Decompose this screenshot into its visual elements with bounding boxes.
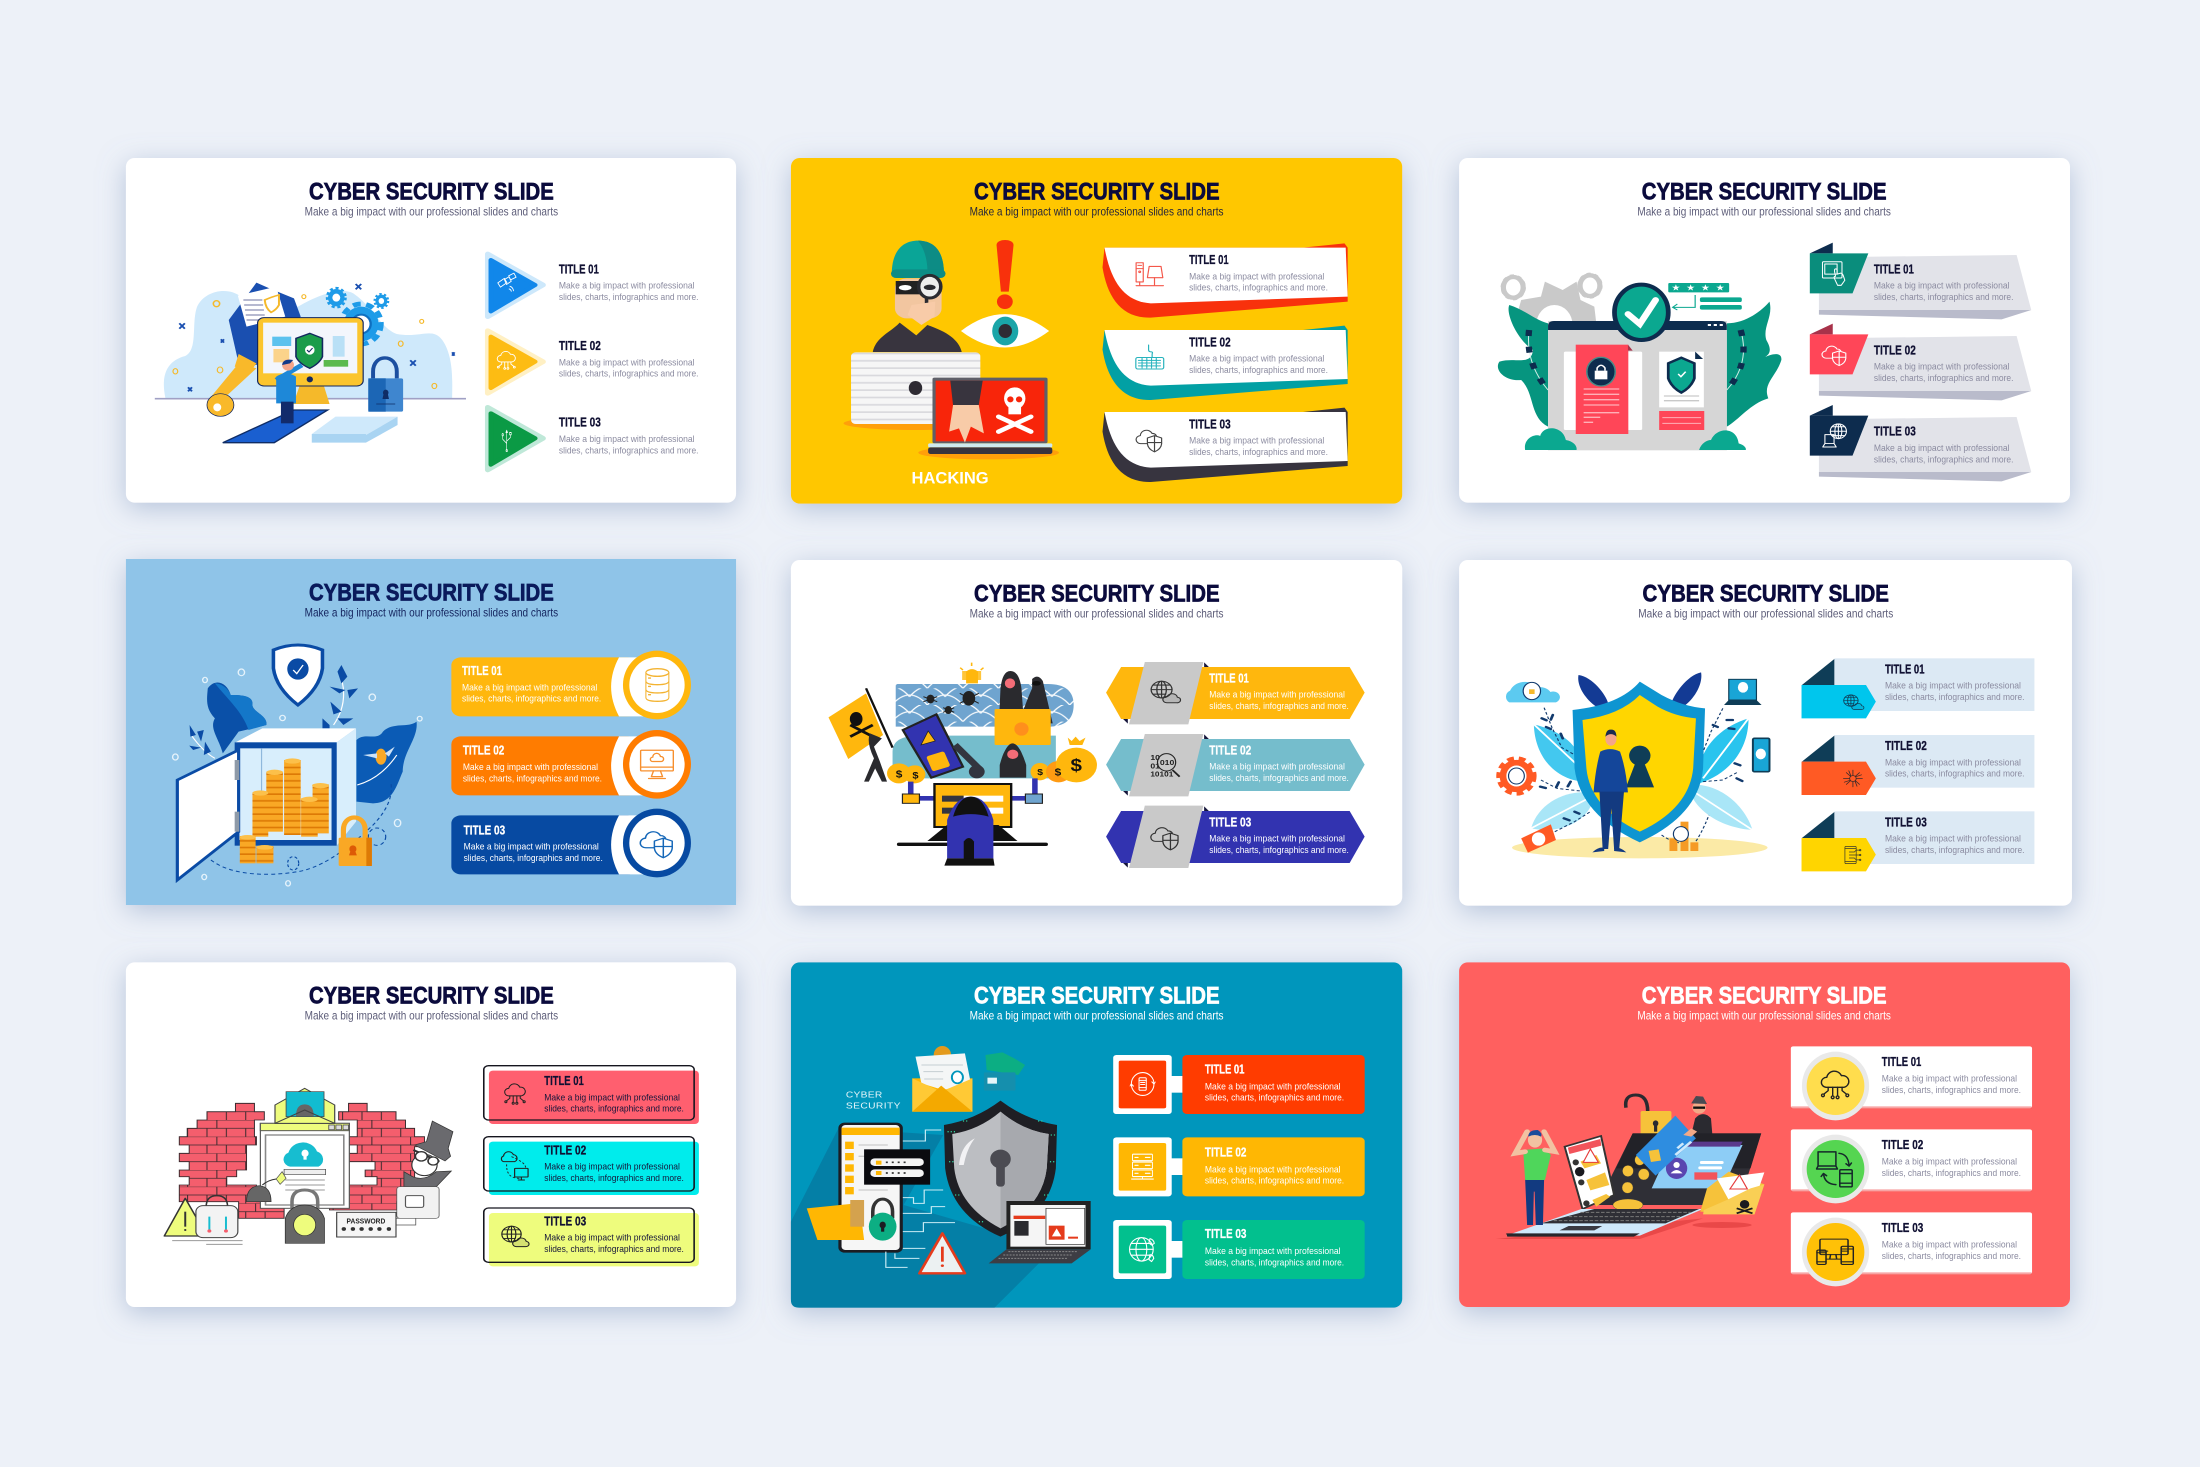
panel: white slide with hackers and bags (791, 560, 1402, 906)
item 03: lime outlined box (484, 1208, 699, 1266)
item 03: green triangle: Make a big impact with professional (559, 435, 695, 445)
item 01: white card yellow circle: Make a big impact with professional (1882, 1074, 2017, 1084)
panel: teal slide with shield and phone (791, 962, 1402, 1308)
illustration: hacked laptop and worried user (1495, 1095, 1764, 1239)
title: CYBER SECURITY SLIDE (974, 981, 1220, 1009)
item 03: indigo hexagon (1106, 806, 1365, 868)
panel: white slide with verified browser (1459, 158, 2070, 503)
item 03: navy tag: Make a big impact with professional (1874, 444, 2010, 454)
item 03: navy tag (1810, 405, 2031, 481)
subtitle: Make a big impact with our professional slides and charts (1638, 607, 1893, 620)
title: CYBER SECURITY SLIDE (1642, 177, 1887, 205)
item 01: yellow hexagon: Make a big impact with professional (1209, 690, 1345, 700)
item 01: teal tag (1810, 243, 2031, 319)
subtitle: Make a big impact with our professional slides and charts (970, 205, 1224, 218)
panel: white slide with shield and man (1459, 560, 2072, 906)
item 01: cyan tag: Make a big impact with professional (1885, 681, 2021, 691)
item 01: red card: Make a big impact with professional (1205, 1082, 1341, 1092)
title: CYBER SECURITY SLIDE (974, 177, 1220, 205)
item 03: yellow tag: Make a big impact with professional (1885, 834, 2021, 844)
item 03: green triangle: TITLE 03 (559, 415, 601, 429)
subtitle: Make a big impact with our professional slides and charts (970, 607, 1224, 620)
item 03: green card (1113, 1220, 1365, 1279)
item 02: red tag: Make a big impact with professional (1874, 362, 2010, 372)
item 02: red tag: TITLE 02 (1874, 342, 1916, 357)
item 02: teal ribbon: slides, charts, infographics and more. (1189, 366, 1328, 376)
item 02: cyan outlined box: Make a big impact with professional (544, 1162, 680, 1172)
item 01: blue triangle: slides, charts, infographics and more. (559, 293, 698, 303)
item 02: aqua hexagon: 10101 (1150, 770, 1174, 778)
item 01: yellow pill: TITLE 01 (462, 663, 502, 678)
item 03: navy tag: slides, charts, infographics and more. (1874, 455, 2013, 465)
label: cyber security: CYBER (846, 1090, 882, 1100)
panel: white slide with brick firewall (126, 962, 736, 1307)
item 02: orange pill (451, 730, 691, 799)
item 02: aqua hexagon: 010 (1160, 759, 1175, 767)
item 03: lime outlined box: slides, charts, infographics and more. (544, 1245, 684, 1255)
item 03: dark ribbon: slides, charts, infographics and more. (1189, 448, 1328, 458)
subtitle: Make a big impact with our professional slides and charts (305, 1009, 558, 1022)
item 03: dark ribbon (1103, 408, 1348, 482)
item 03: dark ribbon: TITLE 03 (1189, 416, 1231, 431)
item 03: lime outlined box: TITLE 03 (544, 1213, 586, 1228)
illustration: phone shield and laptop (791, 1046, 1091, 1308)
item 01: red ribbon: TITLE 01 (1189, 252, 1229, 267)
item 03: indigo hexagon: Make a big impact with professional (1209, 834, 1345, 844)
item 03: navy pill: Make a big impact with professional (464, 842, 599, 852)
item 01: white card yellow circle: slides, charts, infographics and more. (1882, 1086, 2021, 1096)
item 02: white card green circle: TITLE 02 (1882, 1137, 1924, 1152)
illustration: hacker at laptop (844, 240, 1059, 487)
item 03: green card: Make a big impact with professional (1205, 1247, 1341, 1257)
item 03: green triangle: slides, charts, infographics and more. (559, 446, 698, 456)
item 01: white card yellow circle: TITLE 01 (1882, 1054, 1922, 1069)
illustration: hackers stealing data: $ (1037, 768, 1044, 778)
illustration: hackers stealing data (828, 663, 1097, 866)
item 02: white card green circle: slides, charts, infographics and more. (1882, 1169, 2021, 1179)
item 02: cyan outlined box: TITLE 02 (544, 1142, 586, 1157)
item 01: white card yellow circle (1791, 1046, 2032, 1120)
item 03: green triangle (488, 407, 698, 470)
item 01: red ribbon (1103, 243, 1348, 318)
item 02: yellow triangle: TITLE 02 (559, 338, 601, 353)
item 01: red outlined box: slides, charts, infographics and more. (544, 1104, 684, 1114)
item 01: red ribbon: slides, charts, infographics and more. (1189, 283, 1328, 293)
item 03: white card amber circle: Make a big impact with professional (1882, 1240, 2017, 1250)
item 01: yellow hexagon (1106, 662, 1365, 724)
item 02: aqua hexagon: Make a big impact with professional (1209, 762, 1345, 772)
item 01: yellow hexagon: TITLE 01 (1209, 670, 1249, 685)
title: CYBER SECURITY SLIDE (309, 981, 554, 1009)
item 01: cyan tag: TITLE 01 (1885, 661, 1925, 676)
item 01: yellow pill: slides, charts, infographics and more. (462, 694, 601, 704)
item 02: orange tag: slides, charts, infographics and more. (1885, 769, 2025, 779)
subtitle: Make a big impact with our professional slides and charts (1637, 1009, 1891, 1022)
panel: light blue slide with safe (126, 559, 736, 905)
item 03: navy tag: TITLE 03 (1874, 424, 1916, 438)
item 01: red outlined box (484, 1066, 699, 1124)
item 02: aqua hexagon (1106, 734, 1365, 796)
item 01: blue triangle (488, 254, 698, 317)
illustration: open safe with coins (173, 645, 422, 886)
item 02: teal ribbon: Make a big impact with professional (1189, 354, 1324, 364)
label: hacking: HACKING (912, 468, 989, 487)
item 03: yellow tag (1802, 811, 2034, 871)
item 02: aqua hexagon: TITLE 02 (1209, 742, 1251, 757)
item 02: amber card (1113, 1137, 1365, 1196)
item 03: yellow tag: slides, charts, infographics and more. (1885, 846, 2025, 856)
panel: white slide with triangle list (126, 158, 736, 503)
item 02: teal ribbon (1103, 326, 1348, 400)
item 02: orange pill: slides, charts, infographics and more. (463, 774, 602, 784)
item 01: red card (1113, 1055, 1365, 1114)
item 01: teal tag: slides, charts, infographics and more. (1874, 293, 2013, 303)
item 02: orange tag: Make a big impact with professional (1885, 758, 2021, 768)
item 03: navy pill (451, 809, 691, 877)
illustration: user at secure monitor (155, 283, 466, 443)
item 02: aqua hexagon: 10 (1150, 754, 1161, 762)
subtitle: Make a big impact with our professional slides and charts (305, 205, 558, 218)
illustration: verified browser window (1498, 274, 1781, 450)
item 01: cyan tag: slides, charts, infographics and more. (1885, 693, 2025, 703)
item 03: white card amber circle: slides, charts, infographics and more. (1882, 1252, 2021, 1262)
item 02: aqua hexagon: slides, charts, infographics and more. (1209, 774, 1349, 784)
title: CYBER SECURITY SLIDE (1642, 981, 1887, 1009)
title: CYBER SECURITY SLIDE (309, 578, 554, 606)
item 01: teal tag: TITLE 01 (1874, 261, 1914, 276)
item 01: red card: slides, charts, infographics and more. (1205, 1093, 1344, 1103)
item 02: cyan outlined box (484, 1137, 699, 1195)
item 03: green card: TITLE 03 (1205, 1226, 1247, 1241)
item 03: white card amber circle (1791, 1212, 2032, 1286)
item 02: yellow triangle: Make a big impact with professional (559, 358, 695, 368)
illustration: phone shield and laptop: SECURITY (846, 1101, 901, 1111)
illustration: hackers stealing data: $ (1055, 767, 1061, 778)
item 02: white card green circle: Make a big impact with professional (1882, 1157, 2017, 1167)
item 03: white card amber circle: TITLE 03 (1882, 1220, 1924, 1235)
item 01: yellow hexagon: slides, charts, infographics and more. (1209, 702, 1349, 712)
item 02: orange pill: Make a big impact with professional (463, 763, 598, 773)
item 02: amber card: slides, charts, infographics and more. (1205, 1176, 1344, 1186)
subtitle: Make a big impact with our professional slides and charts (1637, 205, 1891, 218)
item 02: orange tag (1802, 735, 2034, 795)
item 03: lime outlined box: Make a big impact with professional (544, 1233, 680, 1243)
item 02: yellow triangle (488, 331, 698, 393)
illustration: shield with keyhole and man (1499, 672, 1769, 858)
item 01: yellow pill (451, 651, 691, 719)
item 02: orange tag: TITLE 02 (1885, 738, 1927, 753)
item 02: cyan outlined box: slides, charts, infographics and more. (544, 1174, 684, 1184)
item 02: white card green circle (1791, 1129, 2032, 1203)
item 03: indigo hexagon: slides, charts, infographics and more. (1209, 846, 1349, 856)
item 01: cyan tag (1802, 658, 2034, 718)
item 03: navy pill: slides, charts, infographics and more. (464, 854, 603, 864)
item 02: orange pill: TITLE 02 (463, 743, 505, 757)
item 01: red outlined box: TITLE 01 (544, 1073, 584, 1088)
item 03: green card: slides, charts, infographics and more. (1205, 1258, 1344, 1268)
item 01: red card: TITLE 01 (1205, 1061, 1245, 1076)
item 02: yellow triangle: slides, charts, infographics and more. (559, 369, 698, 379)
illustration: hackers stealing data: $ (1070, 756, 1082, 776)
item 02: amber card: TITLE 02 (1205, 1144, 1247, 1159)
item 01: yellow pill: Make a big impact with professional (462, 683, 597, 693)
title: CYBER SECURITY SLIDE (974, 579, 1220, 607)
item 02: red tag (1810, 324, 2031, 400)
item 03: dark ribbon: Make a big impact with professional (1189, 436, 1324, 446)
illustration: verified browser window: ★★★★ (1671, 283, 1725, 293)
item 02: amber card: Make a big impact with professional (1205, 1165, 1341, 1175)
item 03: indigo hexagon: TITLE 03 (1209, 814, 1251, 829)
title: CYBER SECURITY SLIDE (1643, 579, 1889, 607)
subtitle: Make a big impact with our professional slides and charts (305, 606, 558, 619)
illustration: hackers stealing data: $ (912, 771, 919, 781)
item 02: teal ribbon: TITLE 02 (1189, 334, 1231, 349)
item 02: aqua hexagon: 01 (1150, 762, 1161, 770)
title: CYBER SECURITY SLIDE (309, 177, 554, 205)
illustration: broken firewall with hacker (164, 1088, 453, 1244)
item 01: blue triangle: Make a big impact with professional (559, 281, 695, 291)
illustration: hackers stealing data: $ (896, 769, 902, 780)
item 02: red tag: slides, charts, infographics and more. (1874, 374, 2013, 384)
item 01: red outlined box: Make a big impact with professional (544, 1093, 680, 1103)
label: password: PASSWORD (347, 1217, 385, 1225)
item 01: teal tag: Make a big impact with professional (1874, 281, 2010, 291)
panel: yellow slide with hacker (791, 158, 1402, 504)
item 03: yellow tag: TITLE 03 (1885, 814, 1927, 829)
item 01: red ribbon: Make a big impact with professional (1189, 272, 1324, 282)
subtitle: Make a big impact with our professional slides and charts (970, 1009, 1224, 1022)
panel: coral slide with hacked laptop (1459, 962, 2070, 1307)
item 01: blue triangle: TITLE 01 (559, 261, 599, 276)
item 03: navy pill: TITLE 03 (464, 822, 505, 837)
